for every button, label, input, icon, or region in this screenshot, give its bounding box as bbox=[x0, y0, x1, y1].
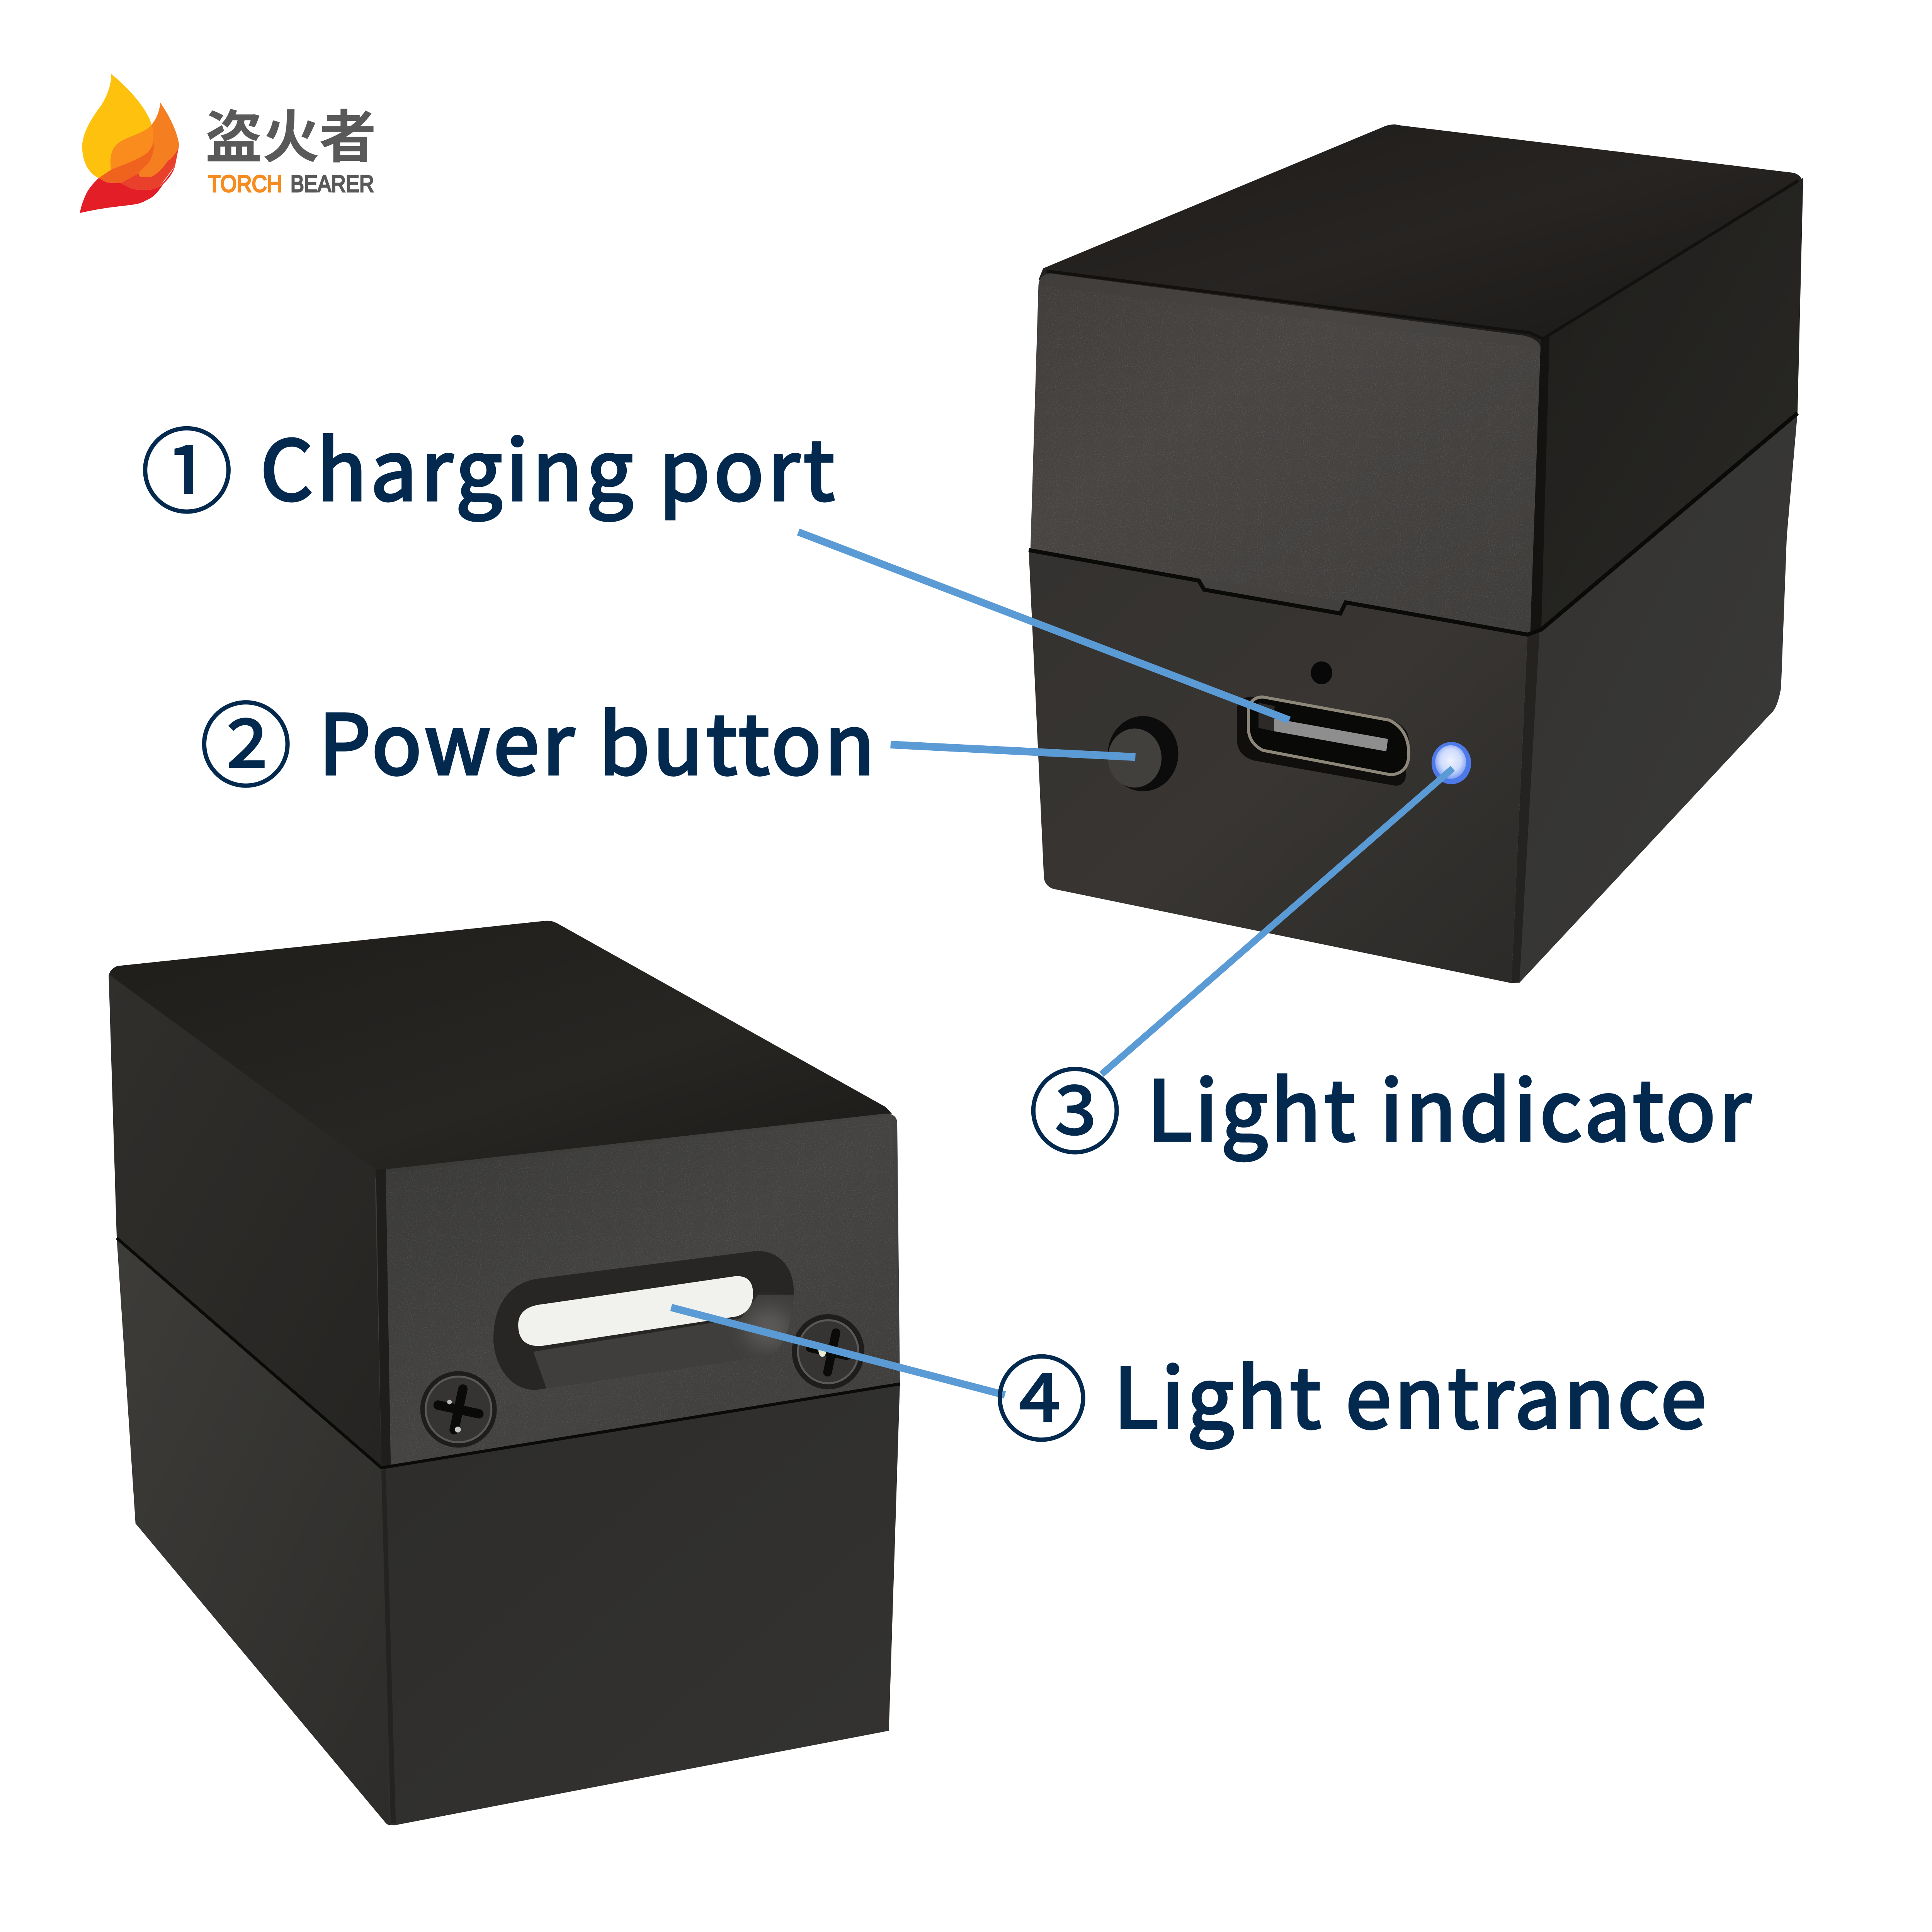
power button bbox=[1108, 716, 1178, 791]
label: light indicator: Light indicator bbox=[1147, 1045, 1751, 1164]
leader line 3: light indicator bbox=[1102, 769, 1453, 1074]
label: light entrance: ④ bbox=[995, 1326, 1088, 1460]
leader line 1: charging port bbox=[798, 532, 1289, 720]
leader line 2: power button bbox=[891, 745, 1135, 757]
lower corner edge bbox=[1511, 631, 1539, 983]
lower corner shadow bbox=[381, 1469, 396, 1823]
device right side lower bbox=[1511, 413, 1798, 983]
product photo: lower device, rear view bbox=[109, 921, 906, 1825]
light entrance bar bbox=[518, 1276, 753, 1346]
device front lower half bbox=[1029, 550, 1533, 983]
screw left bbox=[420, 1371, 497, 1448]
logo wordmark: bearer: BEARER bbox=[291, 171, 374, 197]
label: power button: ② bbox=[199, 672, 292, 806]
microphone hole bbox=[1311, 662, 1332, 684]
recess lower highlight bbox=[533, 1294, 794, 1388]
icon: flame logo bbox=[80, 74, 179, 213]
label: charging port: Charging port bbox=[260, 405, 835, 524]
rear device top face bbox=[109, 921, 892, 1174]
indicator light bbox=[1432, 742, 1471, 784]
rear device front lower bbox=[381, 1384, 900, 1825]
logo bbox=[80, 74, 376, 213]
rear device front upper bbox=[375, 1114, 900, 1468]
seam line bbox=[1029, 413, 1798, 634]
screw right bbox=[792, 1314, 864, 1389]
corner shadow bbox=[376, 1168, 391, 1468]
device top face bbox=[1039, 124, 1803, 345]
top ridge bbox=[1046, 180, 1799, 339]
rear device left lower bbox=[117, 1238, 392, 1825]
label: charging port: ① bbox=[141, 398, 233, 532]
corner shadow edge bbox=[1530, 335, 1549, 633]
device front upper half bbox=[1031, 273, 1541, 633]
label: light entrance: Light entrance bbox=[1114, 1332, 1706, 1452]
charging port bbox=[1237, 697, 1409, 786]
product photo: upper device, front view bbox=[1026, 124, 1803, 983]
leader line 4: light entrance bbox=[671, 1308, 1005, 1395]
label: light indicator: ③ bbox=[1029, 1038, 1121, 1172]
label: power button: Power button bbox=[319, 679, 875, 798]
logo wordmark chinese: 盗火者 bbox=[205, 92, 376, 174]
device right side upper bbox=[1536, 178, 1803, 634]
rear device left upper bbox=[109, 975, 381, 1468]
light window recess bbox=[493, 1251, 794, 1390]
surface grain bbox=[372, 1107, 906, 1473]
logo wordmark: torch: TORCH bbox=[208, 171, 282, 197]
seam line bbox=[117, 1238, 900, 1468]
surface grain bbox=[1026, 268, 1543, 637]
